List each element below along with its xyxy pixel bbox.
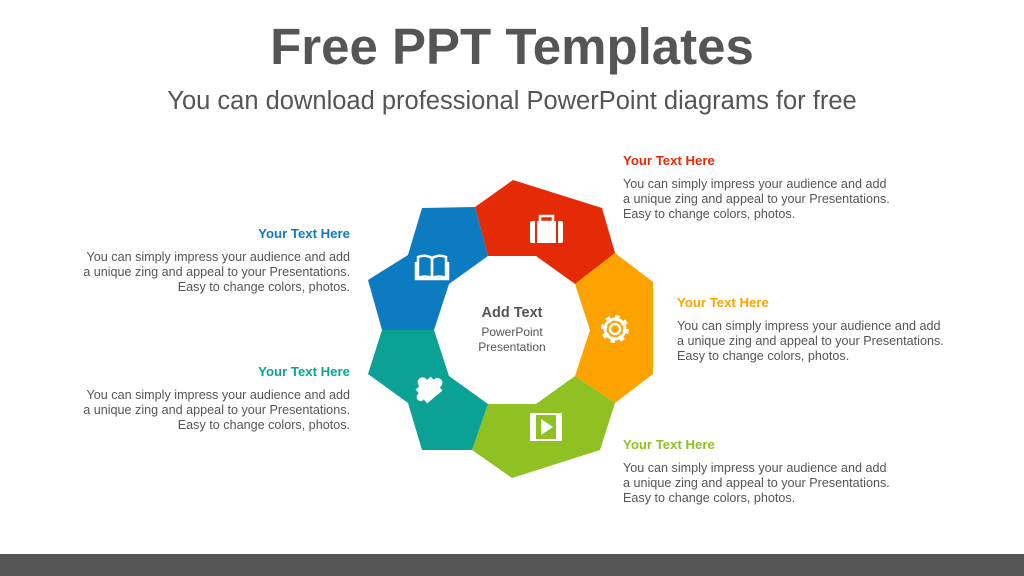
icon: film [530, 413, 562, 441]
text block: orange: Your Text Here [677, 295, 769, 310]
segment: orange [575, 253, 653, 403]
text block: red: a unique zing and appeal to your Presentations. [623, 192, 890, 206]
text block: blue: Easy to change colors, photos. [178, 280, 350, 294]
subtitle: You can download professional PowerPoint diagrams for free [167, 87, 857, 115]
text block: orange: a unique zing and appeal to your Presentations. [677, 334, 944, 348]
segment: green [472, 376, 615, 478]
center text: PowerPoint [481, 325, 543, 339]
text block: green: a unique zing and appeal to your Presentations. [623, 476, 890, 490]
icon: puzzle [408, 368, 447, 407]
icon: book [416, 256, 448, 279]
text block: teal: Easy to change colors, photos. [178, 418, 350, 432]
segment: teal [368, 330, 488, 450]
icon: gear [604, 318, 626, 340]
text block: blue: a unique zing and appeal to your Presentations. [83, 265, 350, 279]
text block: green: You can simply impress your audience and add [623, 461, 886, 475]
text block: orange [677, 295, 944, 363]
text block: teal: Your Text Here [258, 364, 350, 379]
title: Free PPT Templates [270, 18, 754, 75]
text block: blue [83, 226, 350, 294]
text block: green: Easy to change colors, photos. [623, 491, 795, 505]
text block: orange: Easy to change colors, photos. [677, 349, 849, 363]
text block: teal: a unique zing and appeal to your Presentations. [83, 403, 350, 417]
text block: red: Easy to change colors, photos. [623, 207, 795, 221]
text block: blue: You can simply impress your audience and add [87, 250, 350, 264]
text block: red: Your Text Here [623, 153, 715, 168]
text block: green: Your Text Here [623, 437, 715, 452]
text block: teal [83, 364, 350, 432]
icon: briefcase [530, 216, 563, 243]
center text: Add Text [482, 305, 542, 321]
center text [478, 305, 546, 354]
text block: red: You can simply impress your audience and add [623, 177, 886, 191]
text block: blue: Your Text Here [258, 226, 350, 241]
segment: red [475, 180, 615, 284]
text block: green [623, 437, 890, 505]
text block: red [623, 153, 890, 221]
segment: blue [368, 207, 488, 330]
text block: teal: You can simply impress your audience and add [87, 388, 350, 402]
center text: Presentation [478, 340, 546, 354]
footer bar [0, 554, 1024, 576]
text block: orange: You can simply impress your audience and add [677, 319, 940, 333]
